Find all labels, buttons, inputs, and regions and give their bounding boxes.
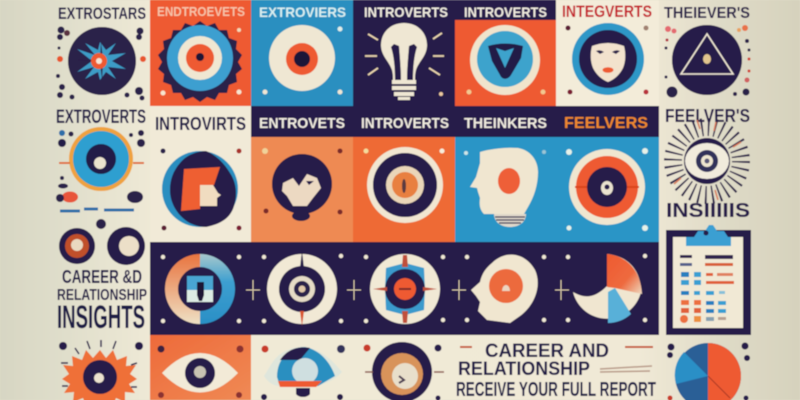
- icon: head profile with orange circle: [471, 255, 569, 323]
- icon: blue dome eye: [261, 345, 345, 400]
- panel: row 1 extroverts cream: [56, 4, 146, 100]
- panel: clipboard: [666, 225, 751, 335]
- heading: INTROVIRTS: [155, 114, 246, 134]
- panel: sun eye and insights: [665, 106, 750, 222]
- panel: row 4 orange sunflower: [59, 340, 143, 400]
- chart: pie: [667, 342, 750, 400]
- icon: concentric eye circle: [364, 147, 444, 223]
- heading: INSIGHTS: [57, 299, 145, 335]
- heading: CAREER &D: [62, 267, 142, 287]
- icon: pie chart: [573, 254, 642, 323]
- heading: THEIEVER'S: [664, 5, 750, 22]
- panel: row 2 light orange: [251, 137, 353, 242]
- heading: INTEGVERTS: [562, 2, 652, 21]
- callout: career and relationship report: [456, 341, 656, 400]
- heading: EXTROVERTS: [56, 107, 146, 128]
- heading: FEELVERS: [564, 115, 648, 132]
- panel: row 1 blue: [251, 0, 353, 106]
- panel: row 4 navy ring: [364, 342, 444, 400]
- heading: THEINKERS: [464, 115, 547, 132]
- icon: face portrait: [566, 23, 648, 95]
- heading: RELATIONSHIP: [57, 287, 147, 304]
- icon: head profile with orange brain: [464, 148, 648, 231]
- panel: row 1 orange: [150, 0, 251, 106]
- panel: row 2 cream introverts: [150, 106, 251, 242]
- heading: INTROVERTS: [464, 4, 547, 20]
- icon: navy circle with two-face shape: [262, 148, 342, 221]
- icon: navy circle with blue star: [56, 26, 146, 100]
- heading: ENDTROEVETS: [157, 4, 245, 19]
- heading: FEELVER'S: [665, 106, 750, 126]
- icon: radiating eye: [673, 120, 741, 200]
- panel: row 1 cream face: [556, 0, 659, 106]
- heading: ENTROVETS: [259, 115, 345, 132]
- icon: concentric circle with V shape: [466, 25, 546, 95]
- heading: RELATIONSHIP: [458, 359, 590, 380]
- icon: ring with tan center: [364, 342, 444, 400]
- icon: triangle in circle: [664, 25, 750, 98]
- icon: two small rings: [59, 227, 145, 265]
- icon: orange sunflower with eye: [59, 340, 143, 400]
- text: insights caption: INSIIIIIS: [666, 200, 750, 222]
- heading: EXTROVIERS: [259, 4, 346, 20]
- panel: row 3 navy band: [150, 242, 659, 335]
- icon: light bulb: [365, 23, 444, 100]
- panel: row 2 concentric extroverts: [56, 107, 146, 229]
- heading: INTROVERTS: [364, 4, 448, 20]
- heading: EXTROSTARS: [58, 4, 146, 23]
- panel: row 1 navy heading and orange: [455, 0, 556, 106]
- dots: navy band markers: [161, 254, 647, 323]
- icon: cream circle with blue star and orange core: [370, 254, 466, 324]
- panel: row 2 heading band: [251, 106, 659, 137]
- panel: row 1 navy light bulb: [353, 0, 455, 106]
- icon: blue navy circle with orange head: [160, 148, 242, 230]
- icon: orange target circle: [569, 149, 645, 225]
- panel: row 2 blue thinkers and feelers: [455, 137, 659, 242]
- clipboard rows: [680, 255, 734, 323]
- panel: career insights left column: [57, 227, 147, 335]
- panel: row 4 orange eye: [150, 335, 251, 400]
- heading: INTROVERTS: [361, 115, 449, 132]
- icon: target circle: [262, 25, 342, 94]
- icon: cream circle with navy eye: [246, 251, 361, 326]
- icon: concentric orange and blue rings: [56, 127, 145, 229]
- panel: row 2 orange: [353, 137, 455, 242]
- panel: row 4 pie chart: [667, 342, 750, 400]
- panel: row 1 thinkers triangle: [664, 5, 750, 98]
- icon: orange and blue ring with keyhole: [165, 254, 235, 324]
- panel: row 4 blue dome: [261, 345, 345, 400]
- heading: CAREER AND: [485, 341, 609, 362]
- icon: eye: [158, 346, 244, 398]
- icon: gear eye: [158, 21, 242, 102]
